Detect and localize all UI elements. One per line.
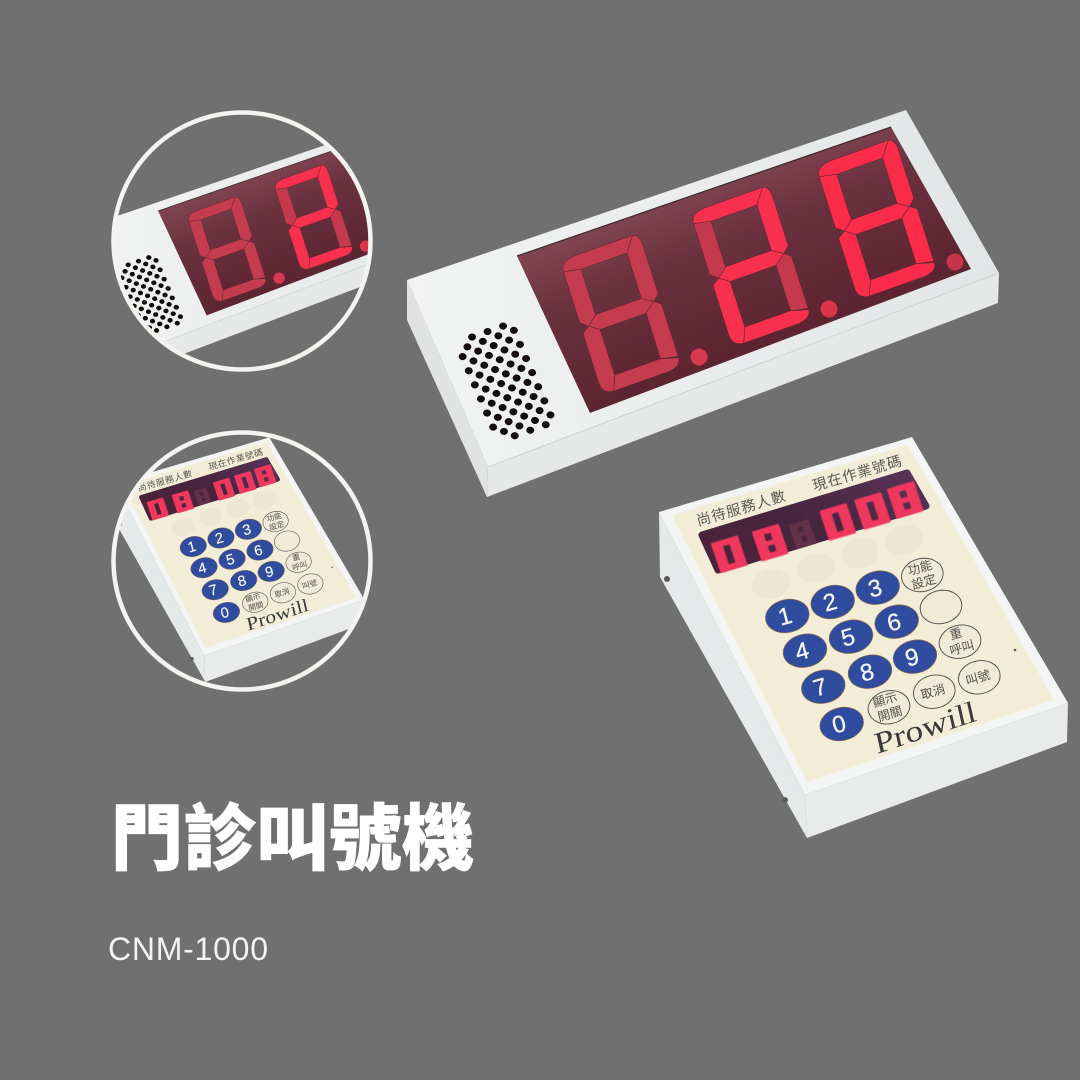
circular inset: display detail: [111, 110, 373, 372]
product photo: wall display unit: [407, 110, 999, 497]
circular inset: keypad detail: [114, 432, 370, 690]
title: 門診叫號機: [111, 800, 474, 880]
model number: CNM-1000: [108, 931, 268, 967]
product photo: keypad controller: [659, 437, 1068, 838]
